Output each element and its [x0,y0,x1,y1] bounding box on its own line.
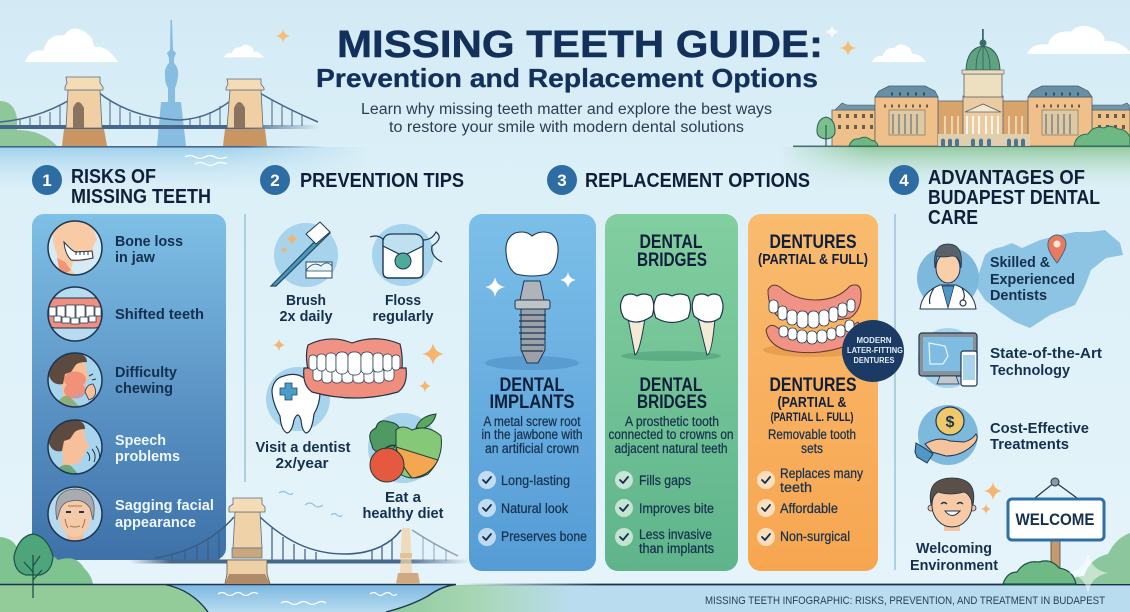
section heading 4: 4 [899,171,909,190]
icon: difficulty chewing [48,353,102,410]
heading: dental implants [490,375,574,413]
heading: dentures [770,375,856,424]
checklist: dentures: Replaces many [780,466,863,481]
clouds: top left [25,29,264,62]
title: Prevention and Replacement Options [316,63,818,93]
label: technology [990,345,1102,379]
heading: dentures: DENTURES [770,375,856,396]
label: healthy diet [362,489,444,522]
section heading 2: 2 [270,171,280,190]
sparkles: top right [825,25,856,56]
icon: dentist [917,244,979,309]
label: speech problems: problems [115,448,180,465]
badge: modern later-fitting dentures: LATER-FITTING [847,346,903,355]
dividers [245,214,895,570]
icon: toothbrush [271,222,338,287]
palace centre block [938,101,1030,146]
icon: coin and hand: $ [946,414,955,431]
checklist: dentures: Non-surgical [780,529,850,544]
label: visit a dentist [256,439,350,472]
label: bone loss [115,233,183,266]
description: implants: in the jawbone with [482,427,582,442]
label: skilled dentists [990,254,1075,304]
icon: shifted teeth [47,287,103,341]
heading: dental bridges [637,375,707,413]
heading: top dentures: DENTURES [770,232,856,253]
label: speech problems: Speech [115,432,166,449]
label: skilled dentists: Skilled & [990,254,1050,271]
icon: implant [485,232,579,370]
description: dentures [768,427,856,456]
waves: lower sky [279,492,342,516]
label: difficulty chewing: chewing [115,380,173,397]
label: cost-effective: Treatments [990,436,1069,453]
checklist: bridges [615,471,714,556]
badge: modern later-fitting dentures: MODERN [856,336,892,345]
panel: dental implants [469,214,596,571]
checklist: implants: Natural look [501,501,568,516]
description: bridges: A prosthetic tooth [625,414,719,429]
bushes: bottom right [1003,533,1130,593]
sign: welcome: WELCOME [1016,510,1094,529]
description: implants [482,414,582,456]
sparkles: prevention [273,339,444,392]
river bank line [0,584,456,612]
section heading 3: REPLACEMENT OPTIONS [585,170,810,192]
label: sagging facial appearance: appearance [115,514,196,531]
panel: risks of missing teeth [32,214,226,560]
checklist: bridges: Less invasive [639,527,712,542]
label: technology: State-of-the-Art [990,345,1102,362]
section heading 1 [32,165,211,208]
label: welcoming environment: Welcoming [916,540,992,557]
label: floss: Floss [385,292,421,309]
checklist: implants: Long-lasting [501,473,570,488]
description: bridges: connected to crowns on [608,427,734,442]
checklist: implants [478,471,587,546]
checklist: bridges: Improves bite [639,501,714,516]
palace side pavilions [875,86,1092,146]
label: sagging facial appearance [115,497,214,531]
section heading 1: RISKS OF [71,166,156,188]
subtitle [361,101,772,136]
heading: dental bridges: DENTAL [640,375,703,396]
icon: full dentures [763,285,863,357]
section heading 3: 3 [557,171,567,190]
description: implants: A metal screw root [484,414,581,429]
palace low wings [832,103,1130,146]
icon: jaw bone loss [48,218,102,278]
label: technology: Technology [990,362,1071,379]
badge: modern later-fitting dentures: DENTURES [854,356,895,365]
label: skilled dentists: Experienced [990,271,1075,288]
icon: floss [370,224,442,286]
description: bridges: adjacent natural teeth [614,441,728,456]
badge: modern later-fitting dentures [842,320,904,382]
label: healthy diet: healthy diet [362,505,444,522]
heading: dental implants: DENTAL [500,375,565,396]
description: dentures: Removable tooth [768,427,856,442]
checklist: dentures: Affordable [780,501,838,516]
hill and tree: bottom left [0,534,208,612]
section heading 4: BUDAPEST DENTAL [928,187,1100,209]
heading: top bridges: DENTAL [640,232,703,253]
label: bone loss: in jaw [115,249,155,266]
palace dome [838,29,1125,146]
heading: dental bridges: BRIDGES [637,392,707,413]
icon: speech problems [48,420,102,477]
label: difficulty chewing [115,364,178,397]
icon: smiling person [928,478,1002,531]
checklist: bridges: Fills gaps [639,473,691,488]
section heading 4 [889,165,1100,229]
checklist: bridges: than implants [639,541,714,556]
label: skilled dentists: Dentists [990,287,1047,304]
icon: coin and hand [915,405,978,465]
label: welcoming environment: Environment [910,557,998,574]
label: bone loss: Bone loss [115,233,183,250]
icon: monitor and phone [918,328,978,388]
panel: dental bridges [605,214,738,571]
icon: sagging face [48,487,102,544]
title: MISSING TEETH GUIDE: [337,24,823,66]
section heading 4: CARE [928,207,978,229]
heading: top dentures [758,232,868,268]
label: speech problems [115,432,180,465]
label: cost-effective: Cost-Effective [990,420,1089,437]
icon: tooth with cross [266,367,330,433]
panel: dentures [748,214,904,571]
heading: top bridges [637,232,707,271]
label: shifted teeth: Shifted teeth [115,306,204,323]
description: dentures: sets [801,441,823,456]
section heading 1: 1 [42,171,52,190]
description: bridges [608,414,734,456]
river band: top left [0,147,349,178]
icon: healthy food [368,413,441,483]
sparkle: top left [276,29,290,43]
Budapest tower silhouette [157,20,186,146]
heading: dentures: (PARTIAL & [778,395,847,411]
label: floss [372,292,434,325]
title [316,24,823,93]
section heading 2 [260,165,464,195]
map of Hungary with pin [975,230,1123,328]
waves: top river [185,156,227,166]
label: brush: Brush [286,292,326,309]
panel: prevention tips [256,222,444,522]
label: visit a dentist: 2x/year [276,455,329,472]
label: floss: regularly [372,308,434,325]
label: sagging facial appearance: Sagging facial [115,497,214,514]
palace: Buda Castle [793,29,1130,147]
subtitle: Learn why missing teeth matter and explore the best ways [361,101,772,118]
green hill band: top right [788,147,1130,180]
icon: dentures [304,339,406,398]
checklist: implants: Preserves bone [501,529,587,544]
sign: welcome [1008,478,1104,572]
label: healthy diet: Eat a [385,489,422,506]
label: visit a dentist: Visit a dentist [256,439,350,456]
chain bridge: bottom [130,498,470,584]
label: welcoming environment [910,540,998,574]
description: implants: an artificial crown [485,441,579,456]
clouds: top right [872,26,1130,62]
footer band with right river bank [386,584,1130,612]
label: brush [280,292,333,325]
label: cost-effective [990,420,1089,453]
section heading 1: MISSING TEETH [71,186,211,208]
river: bottom [140,585,470,612]
checklist: dentures: teeth [780,480,812,495]
palace trees and bushes [817,117,1130,146]
subtitle: to restore your smile with modern dental solutions [389,119,744,136]
section heading 3 [547,165,810,195]
checklist: dentures [757,466,863,546]
heading: dentures: (PARTIAL L. FULL) [770,412,854,424]
heading: top dentures: (PARTIAL & FULL) [758,252,868,268]
heading: dental implants: IMPLANTS [490,392,574,413]
panel: advantages of Budapest dental care [910,230,1123,574]
label: difficulty chewing: Difficulty [115,364,178,381]
icon: bridge [620,294,723,361]
label: brush: 2x daily [280,308,333,325]
heading: top bridges: BRIDGES [637,250,707,271]
section heading 4: ADVANTAGES OF [928,167,1085,189]
chain bridge: top left [0,77,325,148]
section heading 2: PREVENTION TIPS [300,170,464,192]
